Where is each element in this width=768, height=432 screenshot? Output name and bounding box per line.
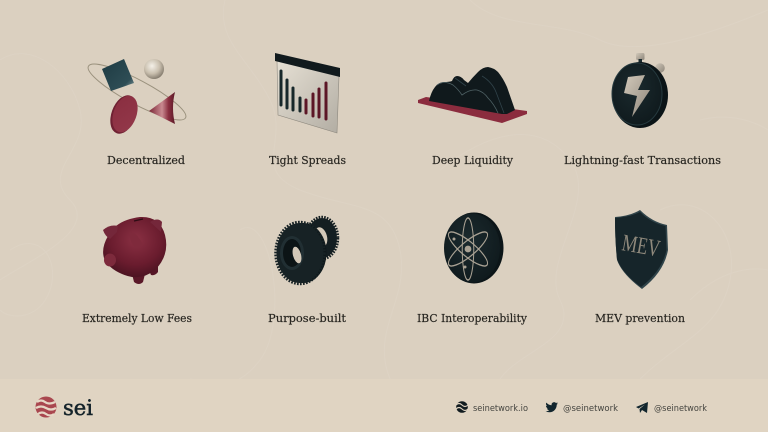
label: MEV prevention	[595, 311, 686, 325]
footer band	[0, 379, 768, 432]
icon: telegram plane	[636, 402, 648, 413]
website link: seinetwork.io	[473, 404, 528, 414]
label: Deep Liquidity	[432, 153, 513, 167]
label: Extremely Low Fees	[82, 311, 192, 325]
icon: mountain chart on plate	[418, 67, 527, 123]
feature: Purpose-built	[268, 217, 346, 325]
twitter link: @seinetwork	[563, 404, 618, 414]
twitter link	[546, 402, 618, 414]
label: Lightning-fast Transactions	[564, 153, 721, 167]
logo: sei	[36, 396, 93, 420]
feature: Deep Liquidity	[418, 67, 527, 167]
icon: sei mark	[36, 396, 56, 418]
feature: Tight Spreads	[269, 53, 346, 167]
feature: Extremely Low Fees	[82, 217, 192, 325]
icon: gears	[276, 217, 338, 284]
shield lettering: MEV	[620, 230, 662, 263]
feature: IBC Interoperability	[417, 212, 527, 325]
label: Decentralized	[107, 153, 186, 167]
icon: piggy bank	[103, 217, 166, 284]
telegram link	[636, 402, 707, 414]
icon: atom coin	[444, 212, 504, 284]
label: Purpose-built	[268, 311, 346, 325]
feature: MEV prevention	[595, 210, 686, 325]
label: Tight Spreads	[269, 153, 346, 167]
icon: bar chart window	[275, 53, 340, 133]
icon: website	[456, 401, 468, 413]
website link	[456, 401, 528, 414]
label: IBC Interoperability	[417, 311, 527, 325]
feature: Lightning-fast Transactions	[564, 53, 721, 167]
icon: stopwatch with bolt	[612, 53, 668, 128]
icon: geometric shapes	[83, 56, 191, 137]
icon: twitter bird	[546, 402, 558, 412]
feature: Decentralized	[83, 56, 191, 167]
telegram link: @seinetwork	[654, 404, 707, 414]
wordmark: sei	[63, 396, 93, 420]
